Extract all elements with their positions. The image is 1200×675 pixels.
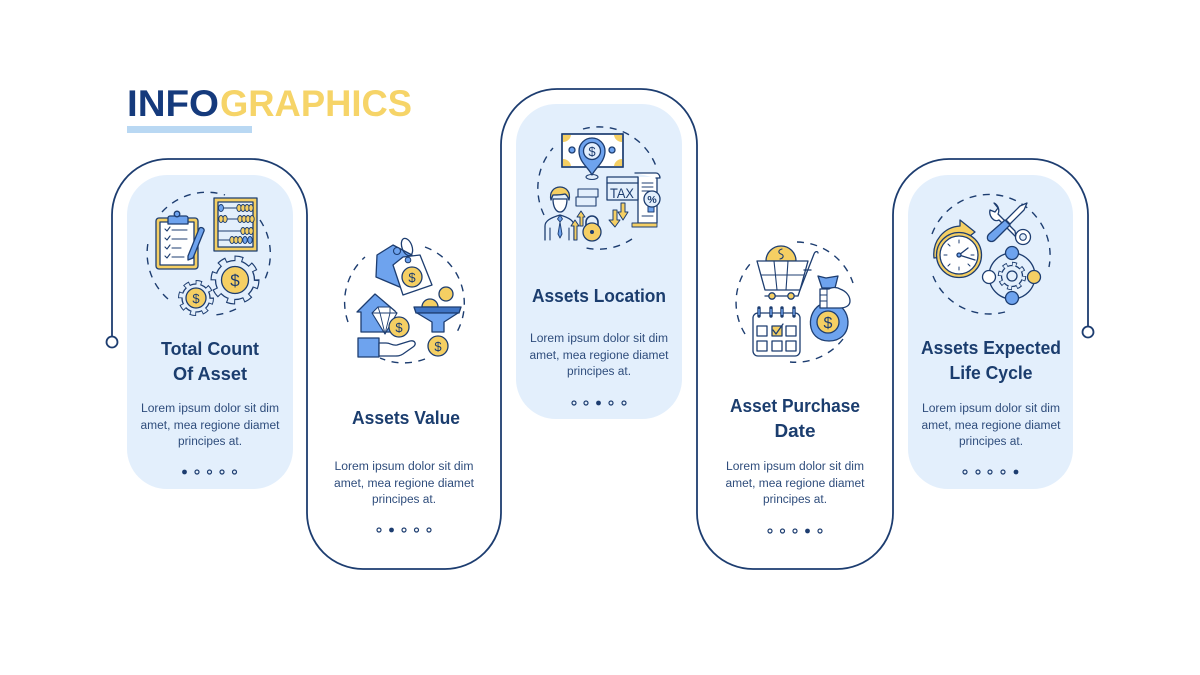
heading: Assets Expected (921, 338, 1061, 358)
icon: price tags, house, funnel and coins: $ (408, 270, 416, 285)
body text: principes at. (372, 494, 436, 506)
icon: clipboard, abacus and gears: $ (230, 271, 240, 290)
icon: cart, money bag and calendar: $ (824, 315, 833, 332)
icon: clipboard, abacus and gears: $ (192, 291, 200, 306)
heading (161, 339, 259, 384)
body text: amet, mea regione diamet (726, 478, 865, 490)
heading: Assets Value (352, 408, 460, 428)
body text: Lorem ipsum dolor sit dim (334, 461, 474, 473)
icon: price tags, house, funnel and coins (345, 237, 464, 363)
connecting outline (106, 89, 1094, 569)
body text: Lorem ipsum dolor sit dim (530, 333, 668, 345)
panel: total count of asset (127, 175, 293, 489)
icon: price tags, house, funnel and coins: $ (395, 320, 403, 335)
heading: Of Asset (173, 364, 247, 384)
body text: amet, mea regione diamet (530, 350, 669, 362)
title: INFO (127, 83, 219, 124)
panel: assets expected life cycle (908, 175, 1073, 489)
icon: cart, money bag and calendar (736, 242, 853, 362)
icon: clipboard, abacus and gears (147, 192, 270, 315)
body text: amet, mea regione diamet (140, 420, 280, 432)
icon: banknote pin, person, lock and tax receipt: $ (588, 144, 596, 159)
panel: asset purchase date (726, 242, 865, 533)
body text (726, 461, 865, 506)
body text (334, 461, 475, 506)
body text (922, 403, 1061, 448)
panel: assets location (516, 104, 682, 419)
body text: principes at. (567, 366, 631, 378)
pagination dots (768, 529, 822, 533)
body text: Lorem ipsum dolor sit dim (726, 461, 864, 473)
heading (921, 338, 1061, 383)
body text: Lorem ipsum dolor sit dim (141, 403, 279, 415)
heading: Life Cycle (950, 363, 1032, 383)
title (127, 83, 412, 124)
heading: Assets Location (532, 286, 666, 306)
body text (530, 333, 669, 378)
icon: banknote pin, person, lock and tax receipt: TAX (610, 186, 634, 201)
pagination dots (572, 401, 626, 405)
heading: Asset Purchase (730, 396, 860, 416)
icon: clock, tools and maintenance cycle (932, 194, 1050, 314)
pagination dots (377, 528, 431, 532)
icon: price tags, house, funnel and coins: $ (434, 339, 442, 354)
pagination dots (963, 470, 1018, 474)
panel: assets value (334, 237, 475, 532)
body text: principes at. (763, 494, 827, 506)
heading: Total Count (161, 339, 259, 359)
body text: amet, mea regione diamet (334, 478, 475, 490)
body text: principes at. (178, 436, 242, 448)
body text (140, 403, 280, 448)
body text: principes at. (959, 436, 1023, 448)
pagination dots (182, 470, 236, 474)
icon: banknote pin, person, lock and tax receipt: % (647, 194, 657, 206)
title: GRAPHICS (220, 83, 412, 124)
title underline (127, 126, 252, 133)
icon: banknote pin, person, lock and tax receipt (538, 127, 660, 249)
body text: amet, mea regione diamet (922, 420, 1061, 432)
body text: Lorem ipsum dolor sit dim (922, 403, 1060, 415)
heading: Date (774, 421, 816, 441)
heading (730, 396, 860, 441)
